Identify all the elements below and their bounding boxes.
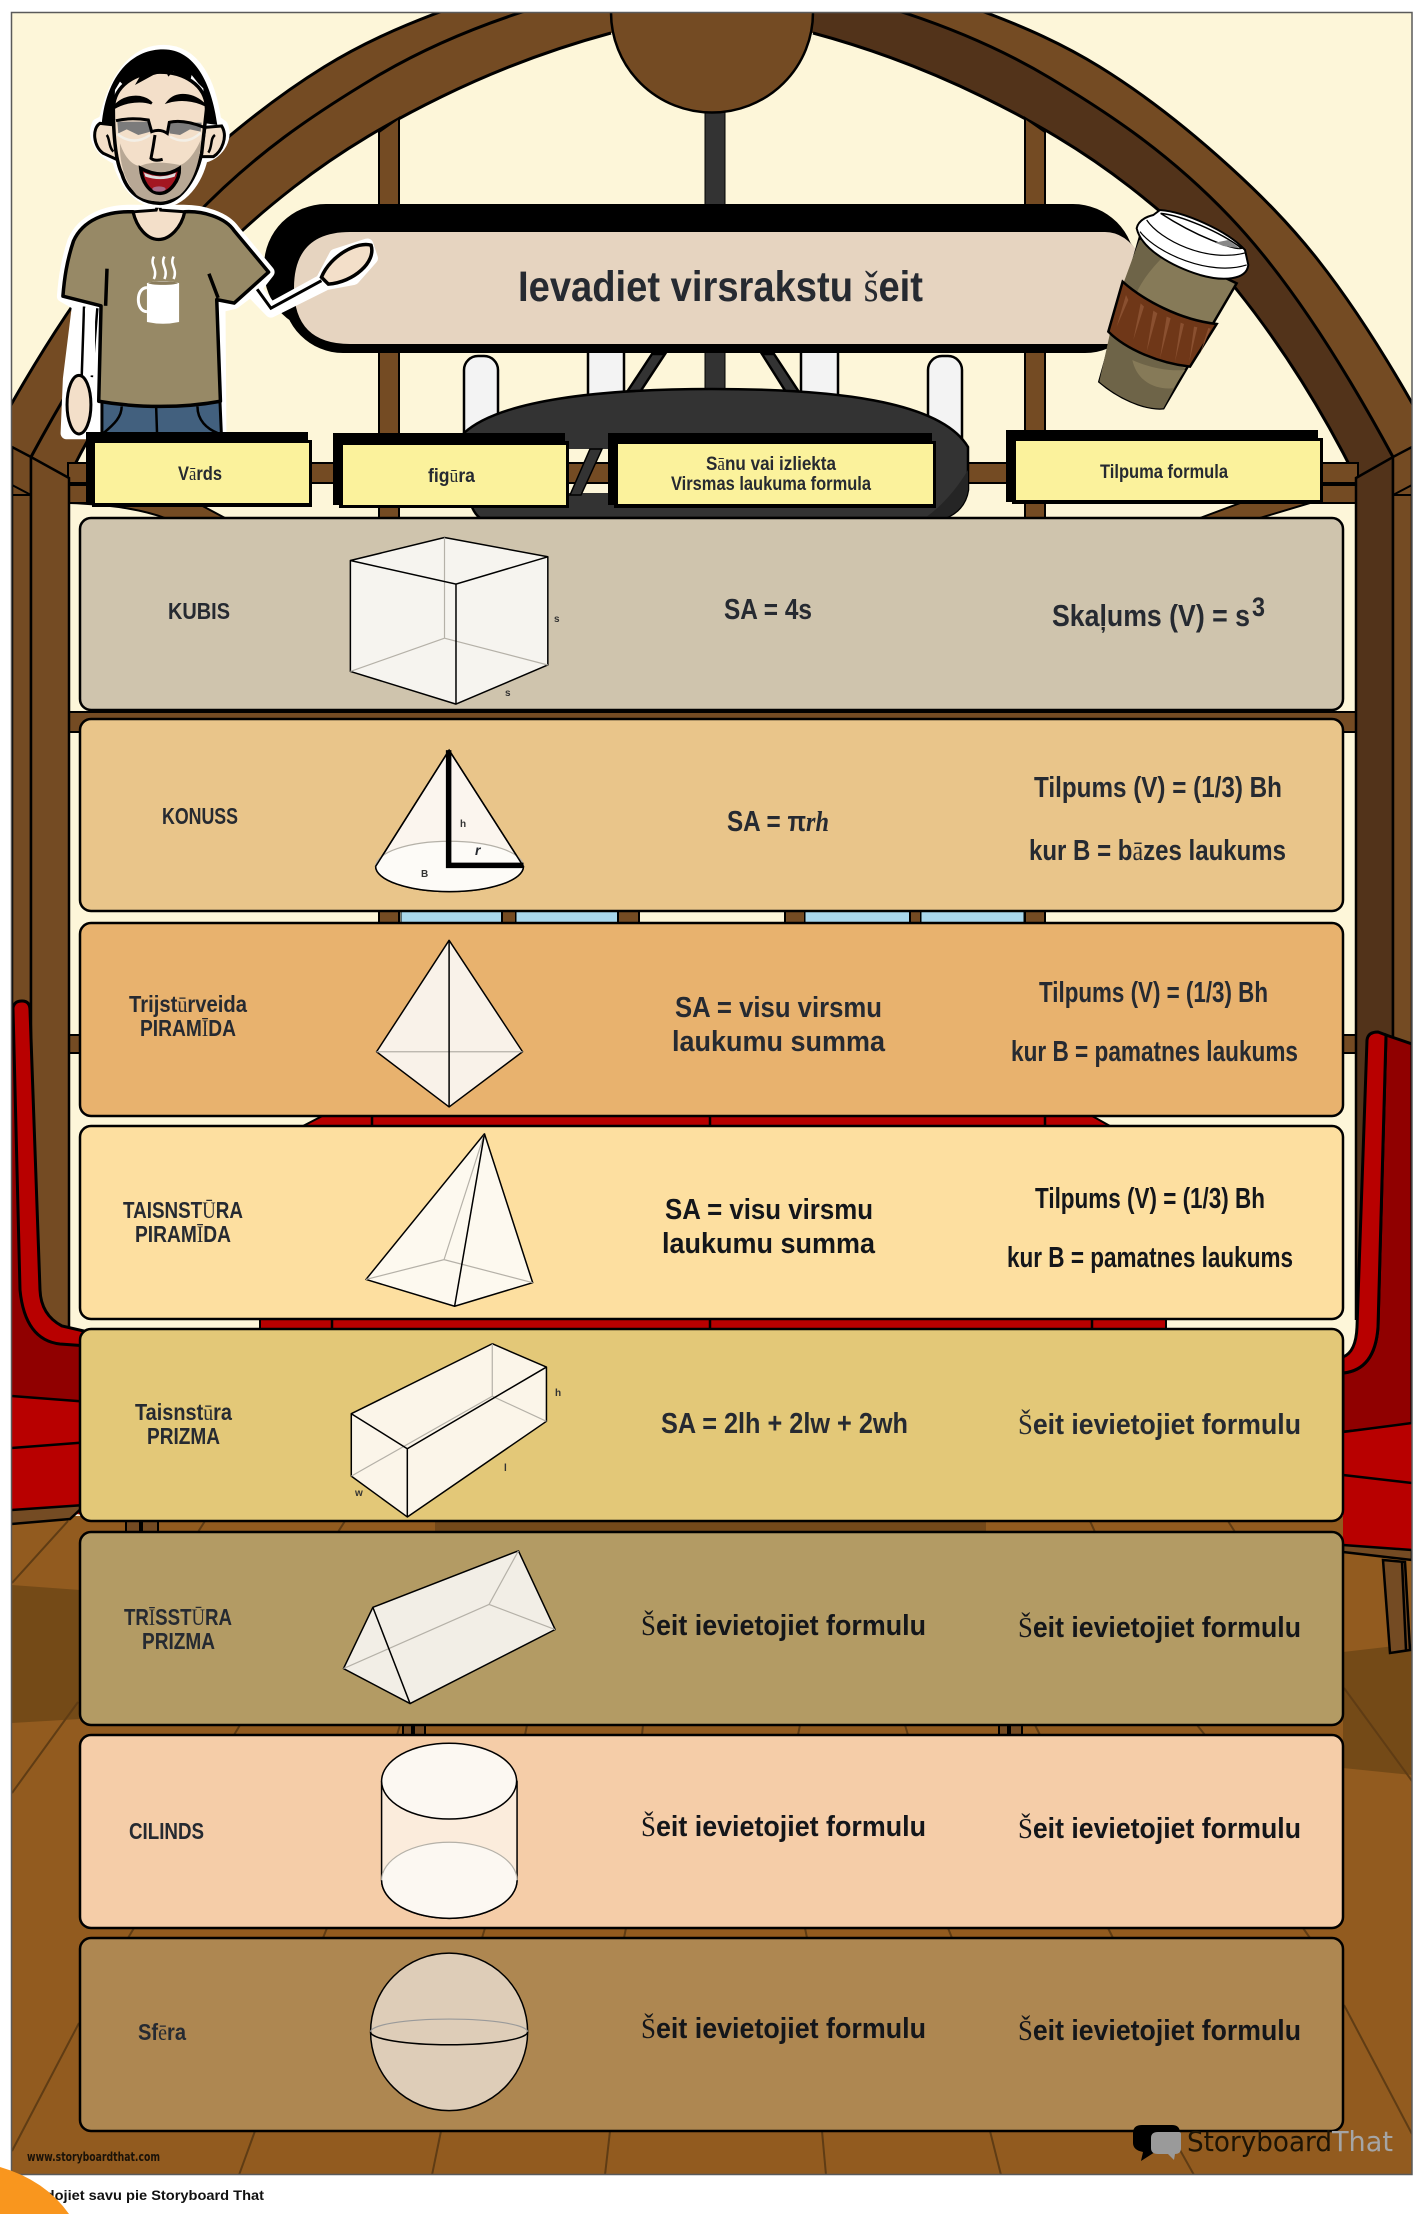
surface area formula: Šeit ievietojiet formulu	[641, 1609, 926, 1642]
window frame posts	[12, 447, 1412, 1340]
volume formula: Tilpums (V) = (1/3) Bh	[1034, 772, 1282, 804]
panel: Trijstūrveida piramīda row	[80, 923, 1343, 1116]
surface area formula: SA = visu virsmu	[665, 1194, 873, 1226]
glasses	[116, 119, 204, 141]
character: man with glasses	[63, 49, 372, 434]
panel: Sfēra row	[80, 1938, 1343, 2131]
footer link text: Izveidojiet savu pie Storyboard That	[14, 2187, 264, 2203]
left arm	[67, 307, 97, 434]
head halo	[95, 49, 225, 203]
volume formula: kur B = pamatnes laukums	[1011, 1036, 1298, 1068]
cone labels: h	[460, 819, 466, 830]
table	[464, 389, 968, 518]
ceiling medallion	[611, 0, 813, 112]
volume formula	[1007, 1183, 1293, 1274]
volume formula	[1011, 977, 1298, 1068]
icon: cylinder	[382, 1743, 517, 1918]
name: PIRAMĪDA	[135, 1221, 231, 1247]
header: Vārds	[86, 432, 312, 507]
window mullions and panes	[379, 100, 1045, 930]
right arm	[257, 244, 372, 308]
white chair backs behind table	[462, 353, 964, 438]
header: surface area formula	[608, 433, 936, 508]
name	[123, 1197, 243, 1247]
header: surface area formula: Sānu vai izliekta	[706, 454, 836, 475]
name: TRĪSSTŪRA	[124, 1604, 232, 1630]
surface area formula: SA = 2lh + 2lw + 2wh	[661, 1408, 908, 1440]
volume formula: Šeit ievietojiet formulu	[1018, 1408, 1301, 1441]
chair tops behind first row	[70, 504, 1310, 517]
name: Sfēra	[138, 2019, 186, 2045]
icon: takeaway coffee cup	[1099, 210, 1248, 408]
name	[129, 991, 247, 1041]
name: PRIZMA	[147, 1423, 220, 1449]
surface area formula: SA = 4s	[724, 594, 812, 626]
shirt	[63, 212, 269, 406]
prism labels: h	[555, 1388, 561, 1399]
prism labels: l	[504, 1463, 507, 1474]
cone labels	[421, 819, 482, 880]
logo: Storyboard That: Storyboard	[1187, 2125, 1332, 2158]
surface area formula: laukumu summa	[672, 1026, 886, 1058]
panel: Taisnstūra prizma row	[80, 1329, 1343, 1521]
panel: KUBIS row	[80, 518, 1343, 710]
icon: rectangular prism	[351, 1344, 546, 1517]
header: Tilpuma formula: Tilpuma formula	[1100, 462, 1228, 483]
nose	[151, 135, 163, 160]
name: PIRAMĪDA	[140, 1015, 236, 1041]
stubble	[120, 140, 201, 201]
website url: www.storyboardthat.com	[27, 2150, 160, 2164]
prism labels: w	[354, 1488, 363, 1499]
volume formula: kur B = bāzes laukums	[1029, 835, 1286, 867]
surface area formula: Šeit ievietojiet formulu	[641, 1810, 926, 1843]
header: surface area formula: Virsmas laukuma formula	[671, 474, 871, 495]
left red chair	[11, 1001, 90, 1524]
volume formula: Skaļums (V) = s	[1052, 598, 1250, 633]
name: TAISNSTŪRA	[123, 1197, 243, 1223]
prism labels	[354, 1388, 561, 1499]
ears	[95, 123, 224, 161]
volume formula: Tilpums (V) = (1/3) Bh	[1039, 977, 1268, 1009]
icon: cone	[376, 750, 523, 892]
logo: Storyboard That: That	[1331, 2125, 1393, 2158]
panel: KONUSS row	[80, 719, 1343, 911]
body	[63, 203, 372, 434]
cone labels: B	[421, 869, 428, 880]
orange corner badge	[0, 2167, 69, 2214]
name: CILINDS	[129, 1818, 204, 1844]
cube labels: s	[554, 614, 560, 625]
transom bars	[68, 463, 1358, 1053]
panel: Taisnstūra piramīda row	[80, 1126, 1343, 1319]
icon: triangular pyramid	[377, 940, 523, 1107]
name: KUBIS	[168, 598, 230, 624]
superscript: 3	[1252, 592, 1265, 622]
icon: sphere	[371, 1953, 528, 2111]
name: Trijstūrveida	[129, 991, 247, 1017]
name: PRIZMA	[142, 1628, 215, 1654]
title text: Ievadiet virsrakstu šeit	[518, 263, 923, 311]
icon: coffee mug on shirt	[138, 257, 179, 324]
shirt sleeve lines	[106, 269, 218, 306]
cone labels: r	[475, 842, 482, 858]
panel: Trīsstūra prizma row	[80, 1532, 1343, 1725]
header: Tilpuma formula	[1006, 430, 1323, 504]
floor shadows and boards	[11, 1521, 1412, 2175]
header: Vārds: Vārds	[178, 464, 222, 485]
hair	[102, 49, 217, 125]
logo: Storyboard That	[1133, 2125, 1393, 2161]
jeans	[102, 401, 221, 433]
head	[95, 49, 225, 203]
cube labels	[505, 614, 560, 699]
right red chair	[1343, 1032, 1412, 1653]
header: figūra	[333, 433, 569, 508]
icon: cube	[350, 537, 548, 704]
neck	[133, 203, 185, 239]
title banner	[264, 204, 1145, 353]
surface area formula: SA = visu virsmu	[675, 992, 882, 1024]
floor	[12, 1516, 1412, 2176]
face	[113, 72, 207, 203]
volume formula	[1029, 772, 1286, 867]
volume formula: Šeit ievietojiet formulu	[1018, 1611, 1301, 1644]
red sofa strip rows	[260, 1112, 1166, 1330]
name: KONUSS	[162, 803, 238, 829]
panel: Cilinds row	[80, 1735, 1343, 1928]
surface area formula: laukumu summa	[662, 1228, 876, 1260]
volume formula: Šeit ievietojiet formulu	[1018, 1812, 1301, 1845]
volume formula: Šeit ievietojiet formulu	[1018, 2014, 1301, 2047]
surface area formula: SA = πrh	[727, 806, 829, 838]
surface area formula: Šeit ievietojiet formulu	[641, 2012, 926, 2045]
name: Taisnstūra	[135, 1399, 232, 1425]
icon: rectangular pyramid	[366, 1134, 533, 1306]
surface area formula	[672, 992, 886, 1058]
cube labels: s	[505, 688, 511, 699]
surface area formula	[662, 1194, 876, 1260]
name	[135, 1399, 232, 1449]
volume formula: kur B = pamatnes laukums	[1007, 1242, 1293, 1274]
icon: triangular prism	[343, 1551, 555, 1704]
mouth	[141, 168, 179, 193]
wooden arch	[12, 13, 1412, 476]
body halo	[63, 211, 372, 433]
eyebrows	[113, 95, 205, 108]
name	[124, 1604, 232, 1654]
header: figūra: figūra	[428, 466, 475, 487]
volume formula: Tilpums (V) = (1/3) Bh	[1035, 1183, 1265, 1215]
